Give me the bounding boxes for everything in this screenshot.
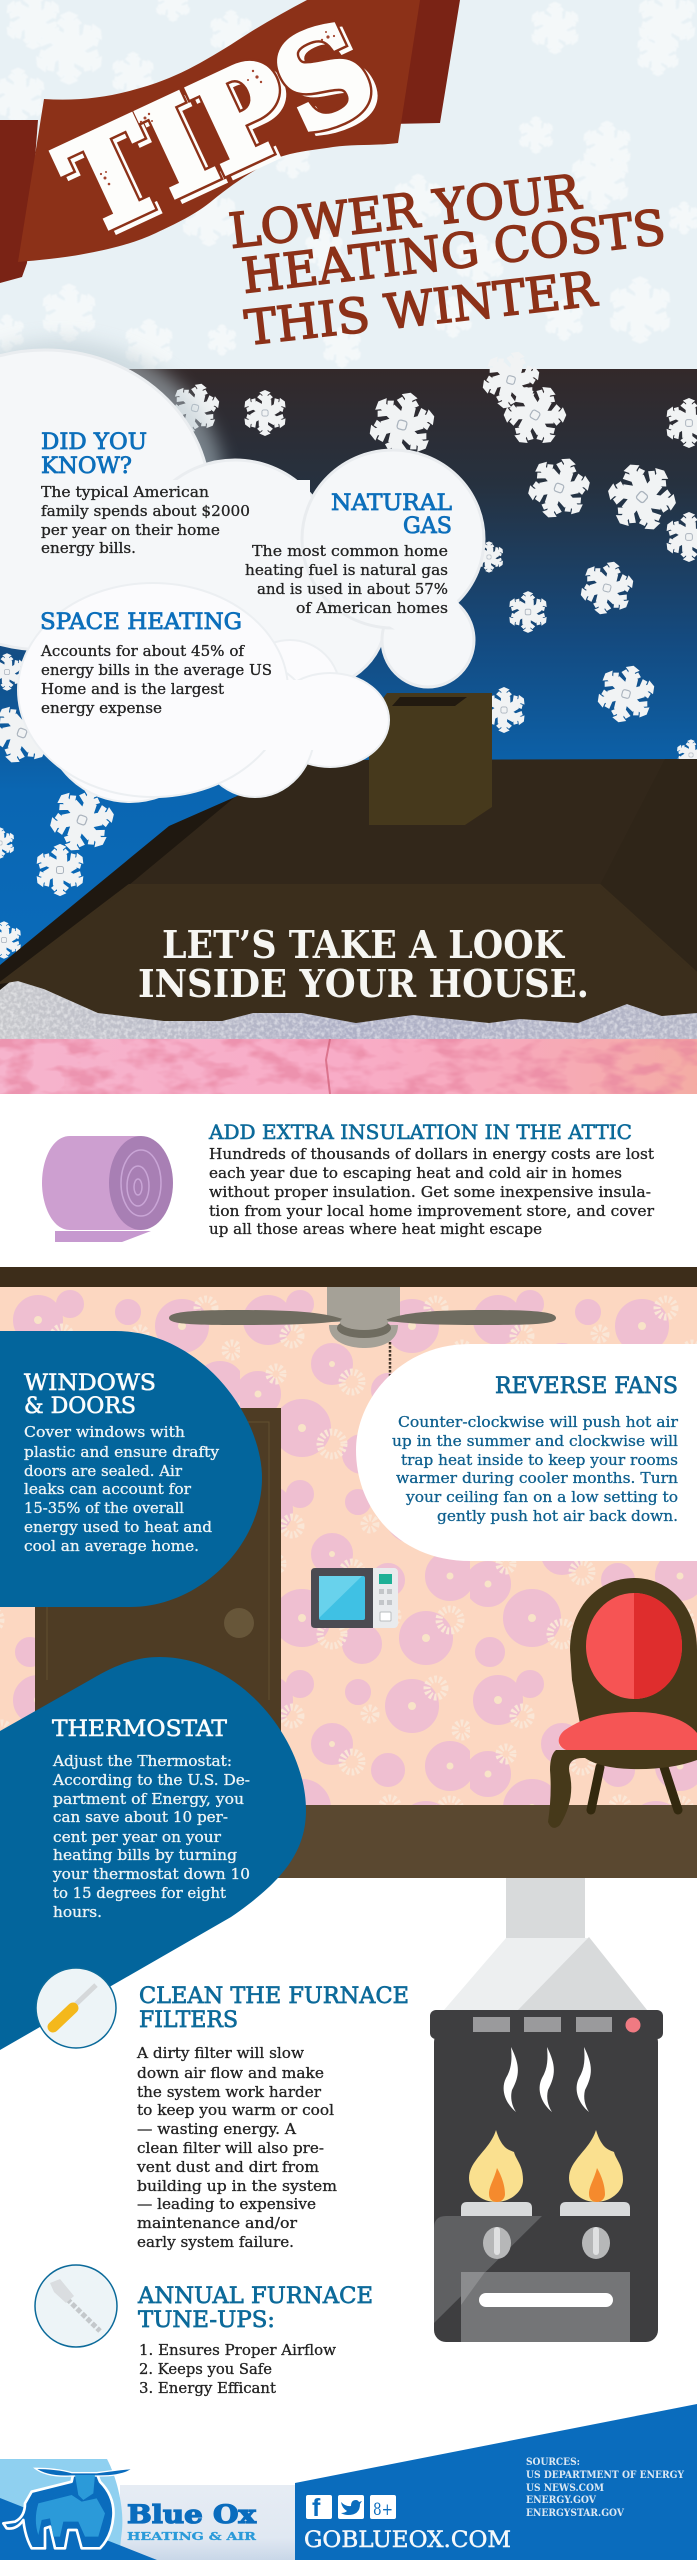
text block: your ceiling fan on a low setting to [405,1488,678,1506]
icon: drill bit in circle [35,2265,117,2347]
space heating text: energy bills in the average US [41,661,272,679]
social icons: f [312,2494,321,2522]
sources [526,2457,685,2519]
sources: US NEWS.COM [526,2483,604,2494]
panel: space heating cloud [18,583,389,802]
icon: ceiling fan [169,1287,556,1390]
heading [41,430,147,479]
social icons [306,2494,396,2522]
footer: Blue Ox logo: HEATING & AIR [127,2529,257,2543]
heading: DID YOU [41,430,147,455]
door [35,1408,281,1808]
footer: Blue Ox logo [0,2459,295,2560]
text block [52,1752,250,1921]
sources: US DEPARTMENT OF ENERGY [526,2470,685,2481]
sources: SOURCES: [526,2457,580,2468]
space heating text: energy expense [41,699,162,717]
text block: early system failure. [137,2233,294,2251]
website: GOBLUEOX.COM [304,2528,511,2553]
text block: hours. [53,1903,102,1921]
text block: maintenance and/or [137,2214,298,2232]
banner with TIPS [0,0,460,283]
text block: cool an average home. [24,1537,199,1555]
text block: doors are sealed. Air [24,1462,183,1480]
text block: to 15 degrees for eight [53,1884,226,1902]
house roof [0,759,697,1022]
did you know text: per year on their home [41,521,220,539]
snow band [0,975,697,1040]
heading: FILTERS [139,2008,238,2033]
text block: partment of Energy, you [53,1790,244,1808]
panel: annual furnace tune-ups [137,2284,373,2397]
numbered list [139,2341,336,2397]
text block: down air flow and make [137,2064,324,2082]
footer: blue sources panel [295,2404,697,2560]
panel: natural gas cloud [302,450,484,687]
text block: gently push hot air back down. [437,1507,678,1525]
text block: without proper insulation. Get some inexpensive insula- [209,1183,651,1201]
title: THIS WINTER [242,261,601,357]
text block: vent dust and dirt from [136,2158,319,2176]
ox mascot [3,2468,133,2548]
text block: up in the summer and clockwise will [392,1432,678,1450]
heading: let's take a look: INSIDE YOUR HOUSE. [138,961,589,1006]
space heating text [40,642,272,717]
cloud shadow [0,340,225,640]
heading [139,1984,409,2033]
panel: attic insulation [0,1094,697,1267]
heading: NATURAL [331,491,452,516]
text block [24,1423,220,1555]
insulation texture band [0,1039,697,1094]
text block: heating bills by turning [53,1846,237,1864]
text block: energy used to heat and [24,1518,212,1536]
text block: Cover windows with [24,1423,185,1441]
heading [137,2284,373,2333]
sources: ENERGY.GOV [526,2495,596,2506]
text block: A dirty filter will slow [136,2044,304,2062]
panel: windows and doors [0,1331,262,1607]
icon: red chair [548,1578,697,1828]
natural gas text: and is used in about 57% [257,580,448,598]
title [226,164,668,357]
text block: each year due to escaping heat and cold air in homes [209,1164,622,1182]
natural gas text: heating fuel is natural gas [245,561,448,579]
floor [0,1805,697,1878]
heading: KNOW? [41,454,132,479]
space heating text: Home and is the largest [41,680,224,698]
brand text: Blue Ox [127,2500,257,2529]
chimney [369,693,492,825]
text block: cent per year on your [53,1828,222,1846]
heading: WINDOWS [24,1371,156,1396]
text block: According to the U.S. De- [52,1771,250,1789]
title: LOWER YOUR [226,164,585,260]
heading: CLEAN THE FURNACE [139,1984,409,2009]
sources: ENERGYSTAR.GOV [526,2508,624,2519]
text block: — wasting energy. A [137,2120,296,2138]
icon: insulation roll [42,1136,173,1242]
heading: GAS [403,514,452,539]
text block: 15-35% of the overall [24,1499,184,1517]
numbered list: 3. Energy Efficant [139,2379,276,2397]
night sky panel [0,369,697,1009]
did you know text: family spends about $2000 [41,502,250,520]
natural gas text: The most common home [252,542,448,560]
illustration: furnace [430,1878,663,2342]
text block: — leading to expensive [137,2195,316,2213]
text block: can save about 10 per- [53,1808,228,1826]
did you know text: energy bills. [41,539,136,557]
text block: Hundreds of thousands of dollars in energy costs are lost [209,1145,654,1163]
icon: wall thermostat [311,1568,398,1628]
did you know text [41,483,250,557]
text block: building up in the system [137,2177,337,2195]
icon: screwdriver in circle [36,1968,116,2048]
heading [331,491,452,539]
panel: reverse fans [356,1344,697,1561]
heading: SPACE HEATING [40,610,242,635]
space heating text: Accounts for about 45% of [40,642,245,660]
text block: plastic and ensure drafty [24,1443,220,1461]
text block: trap heat inside to keep your rooms [401,1451,678,1469]
falling snowflakes [0,345,697,958]
text block: leaks can account for [24,1480,192,1498]
text block: up all those areas where heat might escape [209,1220,542,1238]
sky background: pale winter header [0,0,697,372]
panel: thermostat [0,1657,306,2050]
natural gas text [245,542,448,617]
social icons: 8+ [373,2500,393,2520]
natural gas text: of American homes [296,599,448,617]
ceiling beam [0,1267,697,1287]
decorative pale snowflakes [0,0,697,370]
heading: THERMOSTAT [52,1717,227,1742]
heading: ADD EXTRA INSULATION IN THE ATTIC [208,1120,632,1144]
heading: REVERSE FANS [495,1374,678,1399]
heading: ANNUAL FURNACE [137,2284,373,2309]
text block: your thermostat down 10 [52,1865,250,1883]
text block: tion from your local home improvement store, and cover [209,1202,655,1220]
heading: let's take a look: LET’S TAKE A LOOK [162,922,566,967]
text block: Adjust the Thermostat: [52,1752,232,1770]
heading: & DOORS [24,1394,136,1419]
text block [136,2044,337,2251]
text block [209,1145,655,1238]
room interior wallpaper [0,1287,697,1806]
numbered list: 2. Keeps you Safe [139,2360,272,2378]
heading: let's take a look [138,922,589,1006]
title: HEATING COSTS [239,200,668,305]
text block: the system work harder [137,2083,322,2101]
did you know text: The typical American [41,483,209,501]
text block: warmer during cooler months. Turn [396,1469,678,1487]
numbered list: 1. Ensures Proper Airflow [139,2341,336,2359]
panel: did you know cloud [0,350,385,692]
text block [392,1413,679,1525]
heading: TUNE-UPS: [138,2308,275,2333]
panel: clean the furnace filters [136,1984,409,2251]
text block: clean filter will also pre- [137,2139,324,2157]
text block: Counter-clockwise will push hot air [398,1413,679,1431]
heading [24,1371,156,1419]
text block: to keep you warm or cool [137,2101,334,2119]
